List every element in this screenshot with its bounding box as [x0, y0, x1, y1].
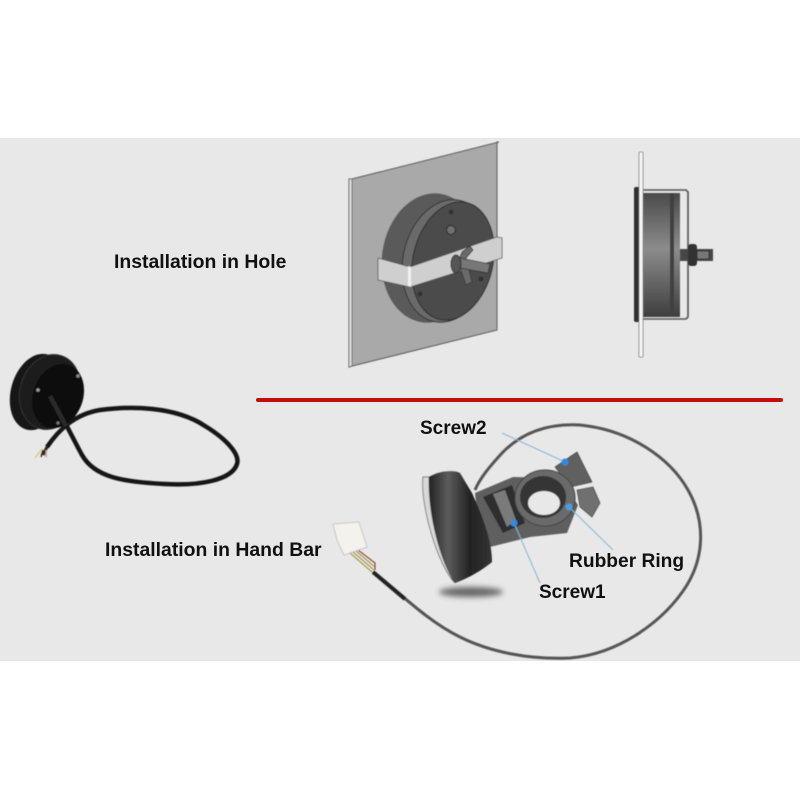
product photo: black meter with cable [1, 347, 237, 484]
blue dots [562, 458, 568, 466]
grey background panel [0, 138, 800, 661]
cable [373, 425, 701, 658]
diagram: meter mounted in hole, perspective view [349, 142, 505, 367]
label: Screw1: Screw1 [539, 582, 606, 603]
red divider line [258, 398, 781, 402]
label: Screw2: Screw2 [420, 418, 487, 439]
clamp ring [515, 470, 575, 526]
connector [333, 522, 367, 555]
heading: Installation in Hand Bar: Installation in Hand Bar [105, 539, 322, 561]
clamp lugs [555, 452, 592, 487]
meter body [429, 471, 492, 583]
diagram: meter mounted in hole, side view [634, 152, 713, 357]
product photo: handlebar mount with cable [333, 425, 701, 658]
callout leaders [502, 433, 613, 583]
label: Rubber Ring: Rubber Ring [569, 551, 684, 572]
heading: Installation in Hole: Installation in Hole [114, 251, 287, 273]
wires [350, 551, 375, 572]
mount arm [475, 477, 578, 547]
shadow under mount [439, 587, 503, 597]
